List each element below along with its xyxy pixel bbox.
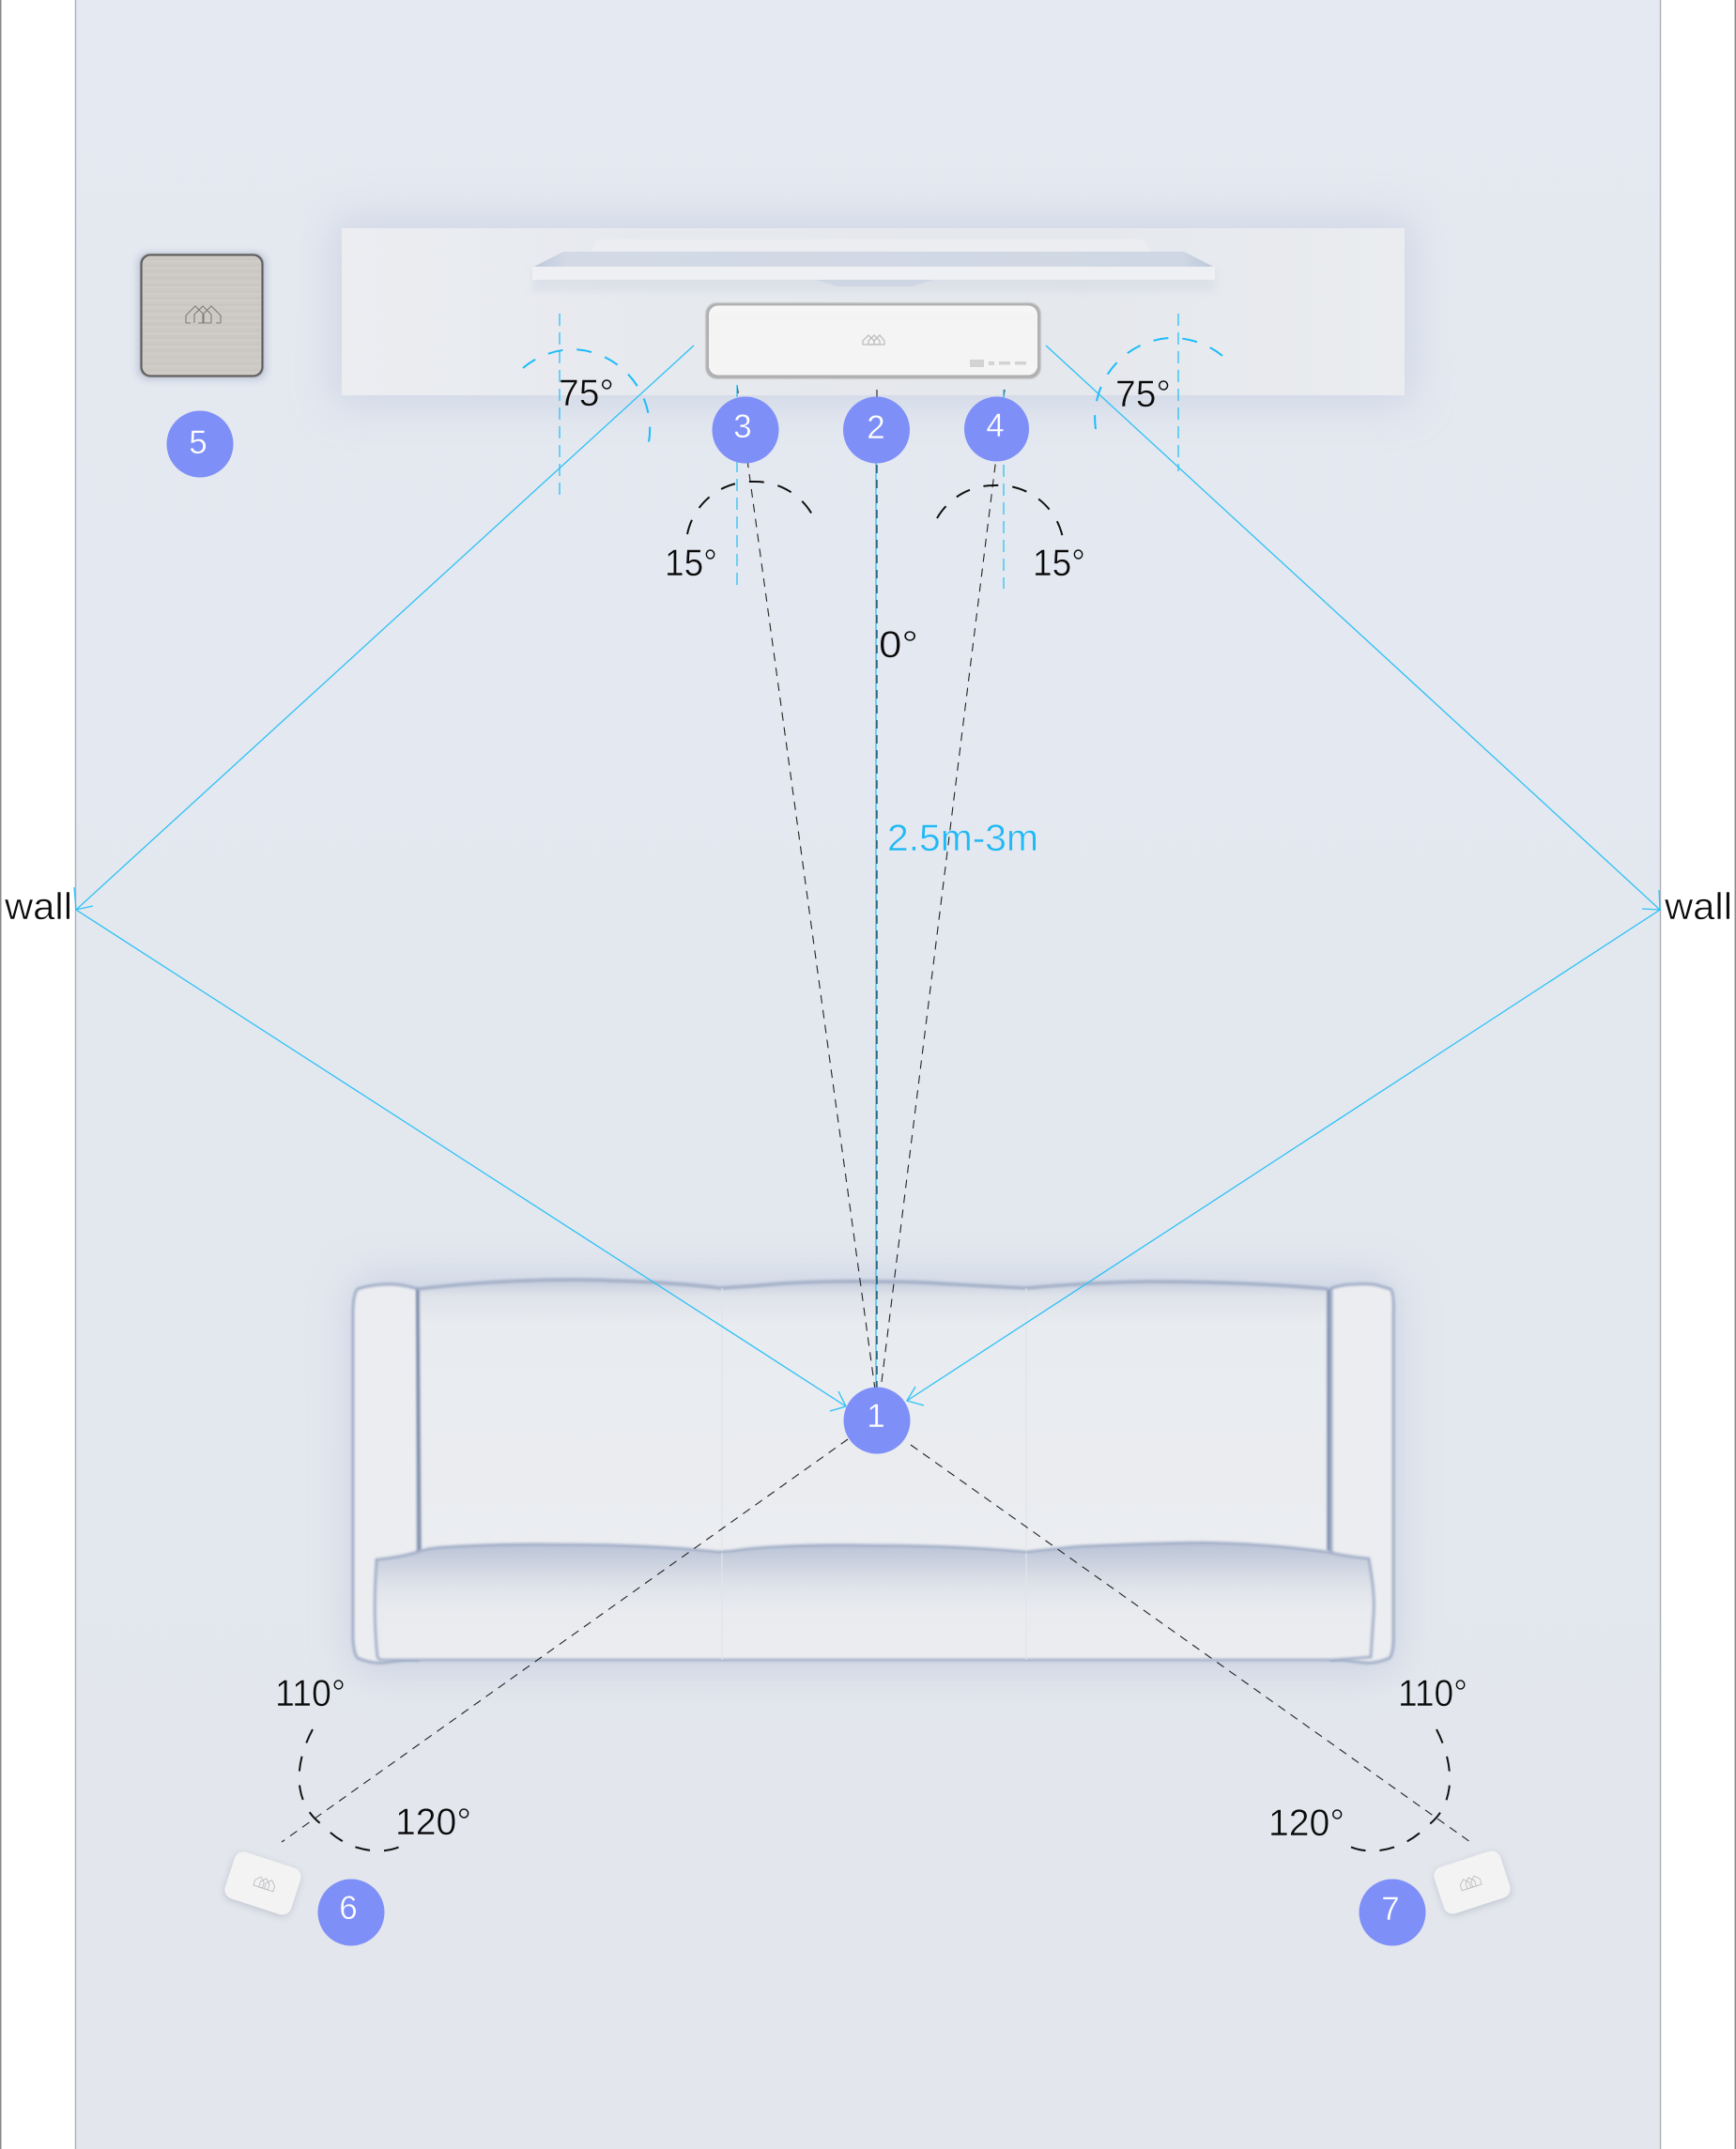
badge 6: 6 <box>339 1890 358 1926</box>
icon: speaker logo <box>1459 1875 1482 1891</box>
black dashed line listener to left surround <box>282 1439 848 1842</box>
label 75 right: 75° <box>1115 374 1171 415</box>
sofa arms <box>353 1284 1393 1663</box>
subwoofer <box>137 253 267 380</box>
black arc bottom left <box>300 1729 400 1850</box>
icon: soundbar logo <box>863 335 884 345</box>
left surround speaker <box>222 1850 303 1919</box>
sofa back edges and arm creases <box>418 1280 1329 1551</box>
badge 1: 1 <box>867 1398 885 1435</box>
icon: speaker logo <box>253 1876 276 1892</box>
right surround speaker <box>1432 1849 1513 1918</box>
badge 3: 3 <box>733 408 752 445</box>
sofa back cushions <box>418 1280 1329 1558</box>
label 110 right: 110° <box>1398 1673 1467 1714</box>
TV console <box>332 218 1414 406</box>
icon: subwoofer logo <box>186 306 221 323</box>
blue dashed vertical 15 right <box>1003 390 1005 589</box>
black dashed line listener to right surround <box>911 1445 1470 1842</box>
blue dashed vertical 15 left <box>736 385 738 589</box>
badge 4: 4 <box>986 407 1005 444</box>
television <box>532 239 1215 291</box>
label 120 left: 120° <box>395 1802 471 1843</box>
sofa seat outline <box>375 1543 1374 1660</box>
badge 1 <box>843 1388 911 1453</box>
blue dashed vertical 75 left <box>559 314 561 499</box>
black dashed line circle 4 to listener <box>881 390 1005 1389</box>
blue dashed vertical 75 right <box>1177 314 1179 471</box>
label 110 left: 110° <box>275 1673 346 1714</box>
black dashed line circle 3 to listener <box>737 385 875 1389</box>
black arc bottom right <box>1350 1729 1450 1850</box>
badge 6 <box>317 1880 385 1945</box>
badge 2: 2 <box>867 409 885 446</box>
black arc left <box>687 482 812 534</box>
badge 7 <box>1360 1880 1425 1945</box>
blue arc left <box>523 349 650 442</box>
black dashed line circle 2 to listener <box>876 390 878 1389</box>
sofa front edge <box>380 1660 1371 1664</box>
label 15 right: 15° <box>1033 543 1085 584</box>
sofa seat cushions <box>375 1543 1374 1660</box>
soundbar badges <box>970 360 1026 367</box>
badge 5: 5 <box>189 424 207 461</box>
soundbar <box>706 302 1040 379</box>
blue reflection path right <box>907 345 1660 1405</box>
blue centre line <box>875 430 877 1389</box>
label 120 right: 120° <box>1268 1803 1344 1844</box>
blue arc right <box>1095 338 1222 429</box>
badge 4 <box>964 396 1029 462</box>
sofa <box>352 1277 1396 1671</box>
badge 7: 7 <box>1381 1891 1400 1927</box>
label 75 left: 75° <box>559 373 614 414</box>
sofa seam lines <box>722 1288 1026 1660</box>
black arc right <box>937 485 1063 538</box>
label wall left: wall <box>4 886 72 928</box>
blue reflection path left <box>74 345 846 1411</box>
badge 5 <box>167 411 233 477</box>
badge 2 <box>843 396 910 464</box>
distance label: 2.5m-3m <box>887 818 1038 859</box>
label 0: 0° <box>879 624 918 666</box>
label 15 left: 15° <box>665 543 717 584</box>
label wall right: wall <box>1664 886 1732 928</box>
badge 3 <box>712 396 779 464</box>
